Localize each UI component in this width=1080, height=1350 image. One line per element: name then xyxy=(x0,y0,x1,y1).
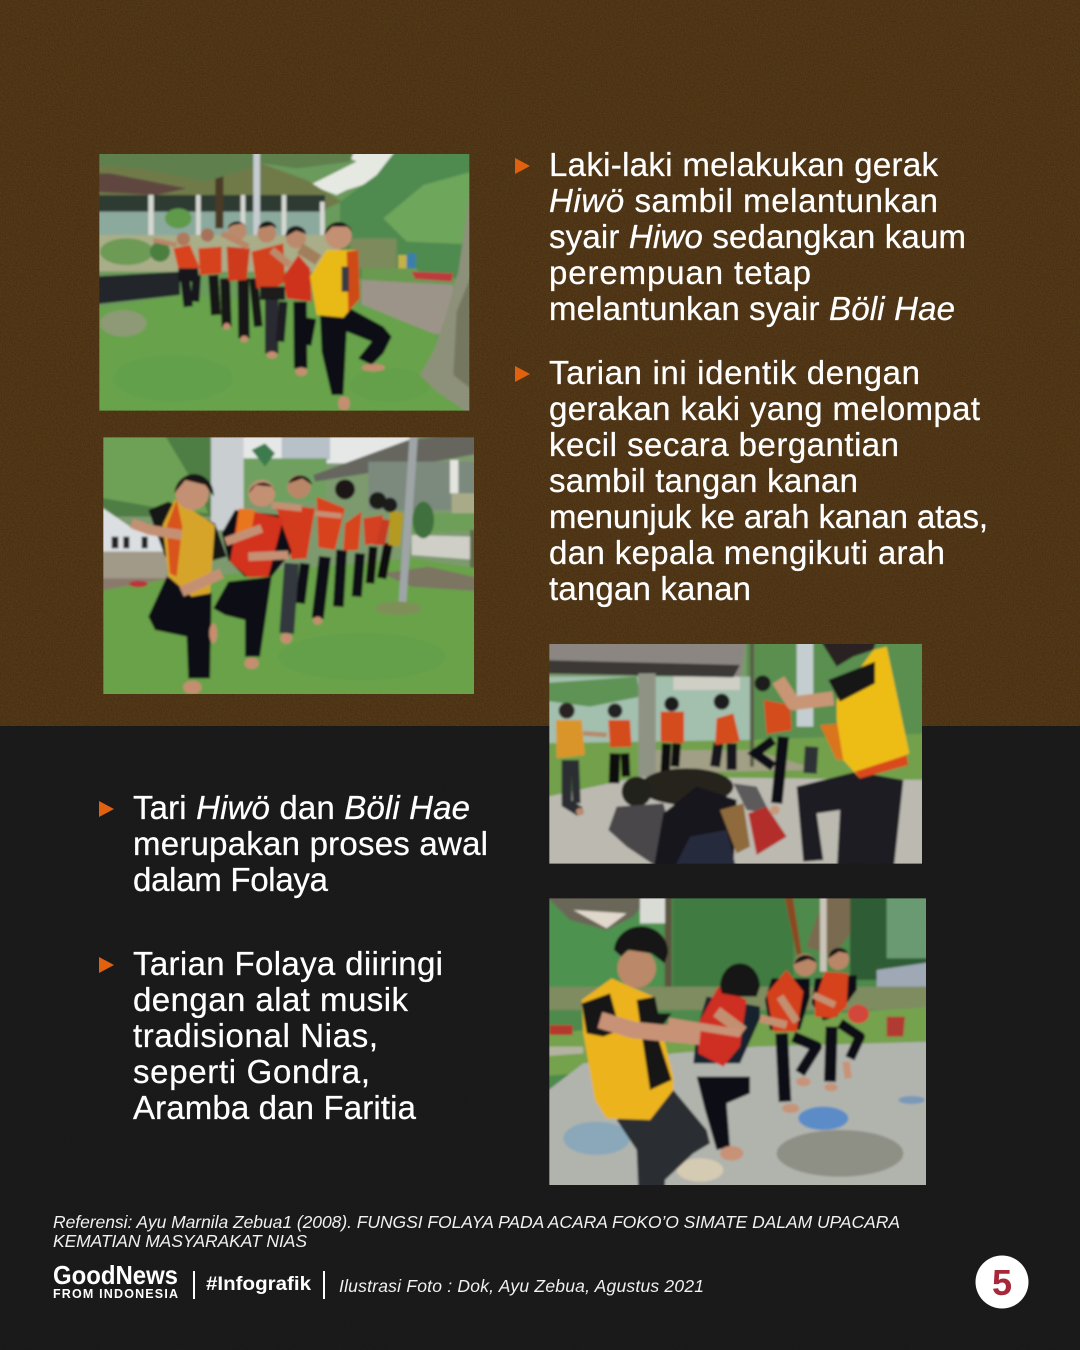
paragraph lines: gerakan kaki yang melompat xyxy=(549,390,980,427)
paragraph lines: Aramba dan Faritia xyxy=(133,1089,417,1126)
reference citation: KEMATIAN MASYARAKAT NIAS xyxy=(53,1231,307,1251)
paragraph lines: dalam Folaya xyxy=(133,861,329,898)
photo credit: Ilustrasi Foto : Dok, Ayu Zebua, Agustus 2021 xyxy=(339,1276,704,1296)
photo: dancers circling a seated group xyxy=(549,644,922,864)
background: black lower panel xyxy=(0,726,1080,1350)
page number badge xyxy=(976,1256,1028,1308)
arrow bullet xyxy=(515,158,530,174)
paragraph lines xyxy=(133,789,488,898)
paragraph lines: menunjuk ke arah kanan atas, xyxy=(549,498,988,535)
page number badge: 5 xyxy=(992,1262,1012,1303)
photo: dancers approaching the camera xyxy=(103,437,474,694)
reference citation xyxy=(53,1212,900,1251)
paragraph lines: Hiwö sambil melantunkan xyxy=(549,182,938,219)
paragraph lines: tangan kanan xyxy=(549,570,751,607)
photo: four dancers on a stone floor xyxy=(549,898,926,1185)
arrow bullet xyxy=(99,801,114,817)
paragraph lines: Tarian Folaya diiringi xyxy=(133,945,443,982)
paragraph lines: tradisional Nias, xyxy=(133,1017,378,1054)
reference citation: Referensi: Ayu Marnila Zebua1 (2008). FUNGSI FOLAYA PADA ACARA FOKO’O SIMATE DALAM UPACARA xyxy=(53,1212,900,1232)
paragraph lines xyxy=(549,354,988,607)
paragraph lines: Tari Hiwö dan Böli Hae xyxy=(133,789,470,826)
paragraph lines: dengan alat musik xyxy=(133,981,408,1018)
text block: footwork and hand gestures xyxy=(515,354,988,607)
footer logo: GoodNews from Indonesia: GoodNews xyxy=(53,1260,178,1290)
paragraph lines: perempuan tetap xyxy=(549,254,811,291)
background: brown upper panel xyxy=(0,0,1080,726)
paragraph lines: melantunkan syair Böli Hae xyxy=(549,290,955,327)
text block: start of Folaya xyxy=(99,789,488,898)
arrow bullet xyxy=(99,957,114,973)
paragraph lines xyxy=(133,945,443,1126)
paragraph lines: dan kepala mengikuti arah xyxy=(549,534,945,571)
paragraph lines: merupakan proses awal xyxy=(133,825,488,862)
paragraph lines: seperti Gondra, xyxy=(133,1053,370,1090)
hashtag: #Infografik xyxy=(206,1274,311,1295)
paragraph lines: kecil secara bergantian xyxy=(549,426,899,463)
paragraph lines: Laki-laki melakukan gerak xyxy=(549,146,938,183)
text block: Hiwö movement and chant xyxy=(515,146,966,327)
text block: traditional instruments xyxy=(99,945,443,1126)
paragraph lines: syair Hiwo sedangkan kaum xyxy=(549,218,966,255)
paragraph lines: sambil tangan kanan xyxy=(549,462,858,499)
arrow bullet xyxy=(515,366,530,382)
paragraph lines xyxy=(549,146,966,327)
footer logo: GoodNews from Indonesia: FROM INDONESIA xyxy=(53,1287,178,1301)
footer logo: GoodNews from Indonesia xyxy=(53,1260,178,1301)
photo: dancers in a line on the grass xyxy=(99,154,470,411)
paragraph lines: Tarian ini identik dengan xyxy=(549,354,920,391)
